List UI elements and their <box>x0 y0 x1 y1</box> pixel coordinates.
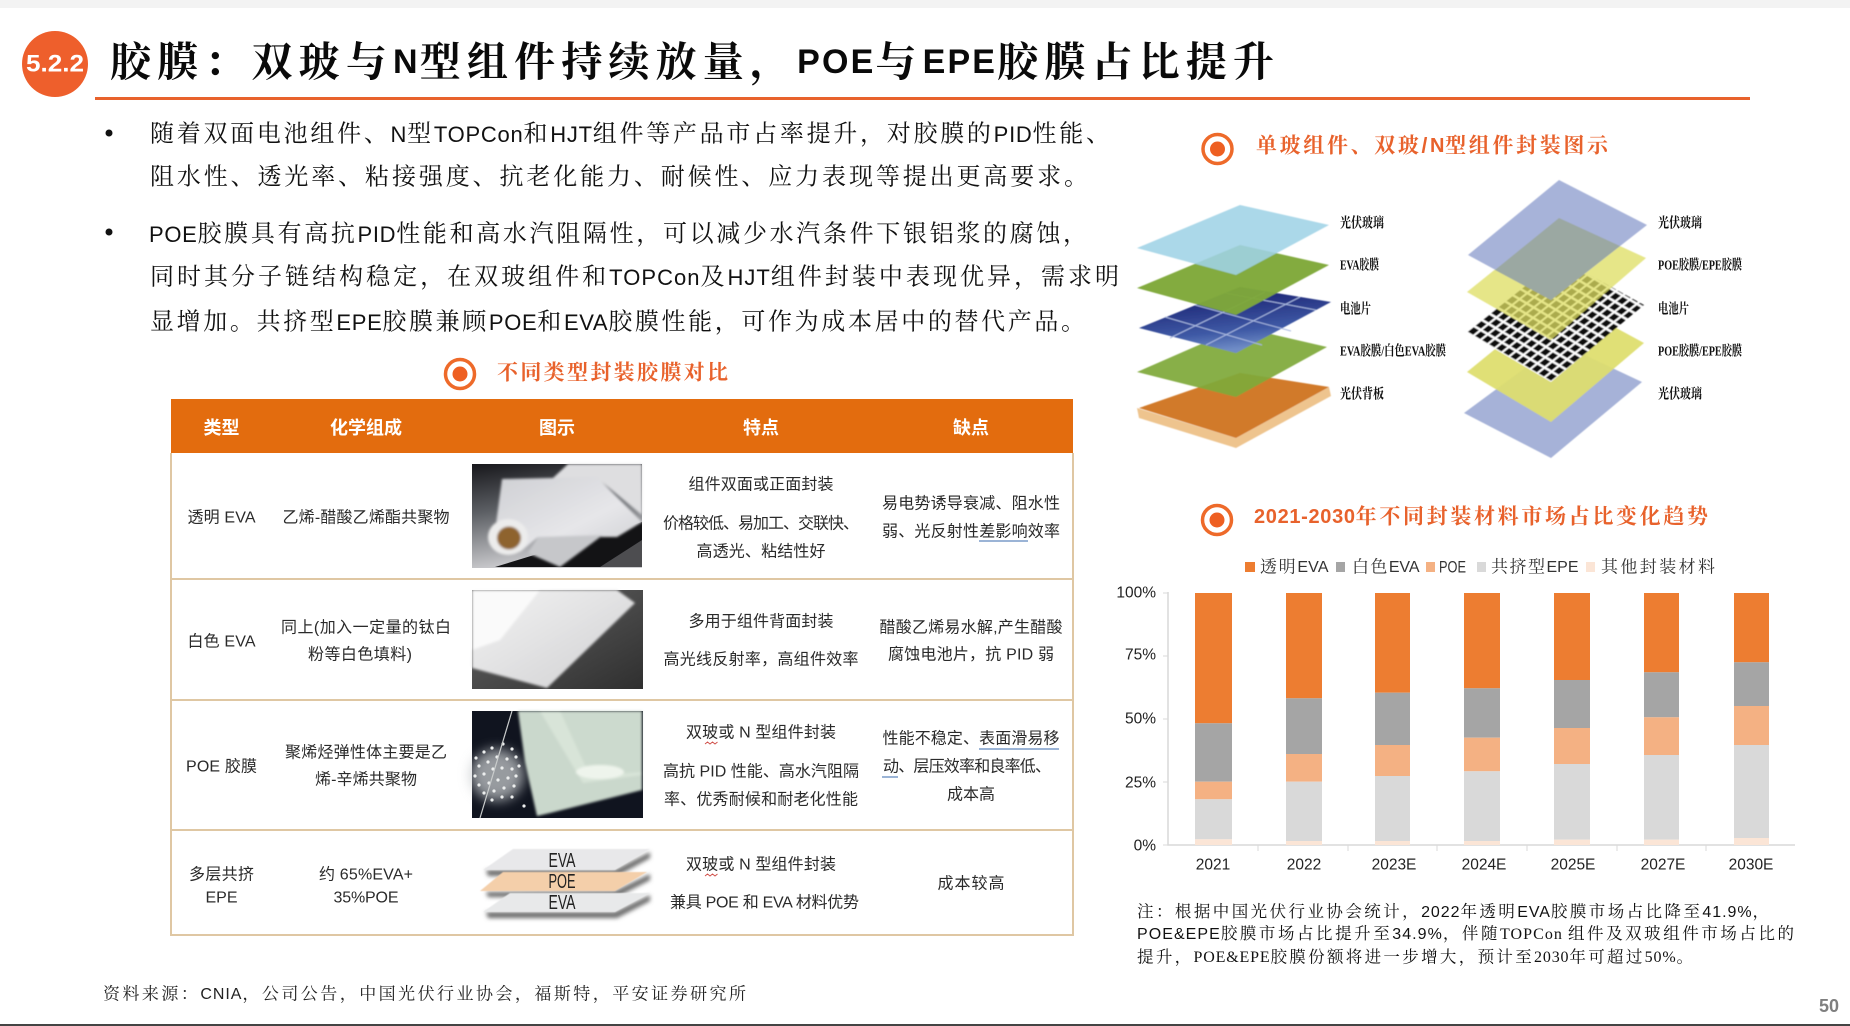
row: POE film <box>186 711 1060 818</box>
row: transparent EVA: 高透光、粘结性好 <box>696 542 826 560</box>
diagram labels: double glass: 光伏玻璃 <box>1658 386 1702 402</box>
row: white EVA: 多用于组件背面封装 <box>688 612 834 630</box>
bullet 2: POE胶膜具有高抗PID性能和高水汽阻隔性，可以减少水汽条件下银铝浆的腐蚀， <box>149 220 1087 248</box>
table header: 图示 <box>539 418 575 438</box>
row: transparent EVA: 透明 EVA <box>188 508 256 526</box>
y axis labels: 25% <box>1125 774 1156 792</box>
heading: market share trend: 2021-2030年不同封装材料市场占比变化趋势 <box>1254 504 1708 528</box>
bottom rule <box>0 1024 1850 1026</box>
chart legend: 其他封装材料 <box>1601 556 1715 576</box>
layer: glass over film overlap <box>1495 218 1620 300</box>
image: transparent EVA roll <box>472 464 642 568</box>
heading: encapsulation diagram <box>1203 134 1610 164</box>
bullet 2 <box>106 220 1119 336</box>
row: white EVA <box>188 590 1062 689</box>
row: POE film: 动、层压效率和良率低、 <box>883 758 1051 776</box>
row: transparent EVA: 组件双面或正面封装 <box>688 476 834 494</box>
y axis labels: 50% <box>1125 710 1156 728</box>
page number: 50 <box>1819 996 1839 1016</box>
bar 2023E <box>1375 593 1410 845</box>
diagram: single glass module <box>1137 205 1331 448</box>
row: multilayer EPE <box>189 849 1004 918</box>
row: multilayer EPE: 35%POE <box>334 890 398 906</box>
chart legend: 白色EVA <box>1352 558 1420 576</box>
row: multilayer EPE: 多层共挤 <box>189 866 254 884</box>
diagram labels: double glass <box>1658 214 1742 402</box>
diagram labels: double glass: POE胶膜/EPE胶膜 <box>1658 342 1742 360</box>
row: multilayer EPE: 兼具 POE 和 EVA 材料优势 <box>670 894 859 912</box>
table frame <box>171 453 1073 935</box>
row: transparent EVA: 价格较低、易加工、交联快、 <box>663 514 859 532</box>
row: POE film: 成本高 <box>947 786 995 804</box>
bullet 1: 随着双面电池组件、N型TOPCon和HJT组件等产品市占率提升，对胶膜的PID性能、 <box>150 120 1110 148</box>
intro text block <box>106 120 1119 336</box>
chart note: POE&EPE胶膜市场占比提升至34.9%，伴随TOPCon 组件及双玻组件市场占比的 <box>1137 924 1794 943</box>
row: white EVA: 高光线反射率，高组件效率 <box>664 650 858 668</box>
y axis labels: 75% <box>1125 646 1156 664</box>
layer: EVA film upper <box>1137 245 1329 315</box>
chart note: 注：根据中国光伏行业协会统计，2022年透明EVA胶膜市场占比降至41.9%， <box>1137 901 1769 921</box>
heading: market share trend <box>1202 504 1708 534</box>
x axis labels <box>1196 856 1773 874</box>
image: EVA POE EVA layers: POE <box>548 871 576 893</box>
diagram: double glass module <box>1464 180 1647 458</box>
heading: film comparison <box>446 360 728 388</box>
row: multilayer EPE: 成本较高 <box>938 874 1004 892</box>
title: 胶膜：双玻与N型组件持续放量，POE与EPE胶膜占比提升 <box>110 39 1274 86</box>
layer: upper POE film <box>1467 218 1646 340</box>
x axis labels: 2021 <box>1196 856 1230 874</box>
x axis labels: 2027E <box>1641 856 1685 874</box>
layer: lower POE film <box>1467 297 1644 422</box>
row: transparent EVA: 易电势诱导衰减、阻水性 <box>882 494 1060 512</box>
chart note <box>1137 901 1794 966</box>
x axis labels: 2030E <box>1729 856 1773 874</box>
table header <box>171 399 1073 453</box>
bar 2021 <box>1195 593 1232 845</box>
table header: 特点 <box>743 418 779 438</box>
row: transparent EVA: 弱、光反射性差影响效率 <box>882 522 1060 540</box>
row: POE film: 烯-辛烯共聚物 <box>315 770 417 788</box>
chart note: 提升，POE&EPE胶膜份额将进一步增大，预计至2030年可超过50%。 <box>1137 946 1693 966</box>
table header: 缺点 <box>953 418 989 438</box>
row: white EVA: 腐蚀电池片，抗 PID 弱 <box>888 646 1054 664</box>
row: POE film: POE 胶膜 <box>186 758 257 776</box>
heading: film comparison: 不同类型封装胶膜对比 <box>497 362 728 384</box>
row: white EVA: 白色 EVA <box>188 632 256 650</box>
layer: EVA film lower <box>1137 327 1327 397</box>
layer: upper glass <box>1468 180 1647 300</box>
row: multilayer EPE: 约 65%EVA+ <box>319 866 413 884</box>
diagram labels: single glass: EVA胶膜/白色EVA胶膜 <box>1340 342 1446 360</box>
image: EVA POE EVA layers <box>480 849 650 918</box>
bar 2025E <box>1554 593 1590 845</box>
comparison table <box>171 399 1073 935</box>
row: transparent EVA: 乙烯-醋酸乙烯酯共聚物 <box>282 508 450 526</box>
diagram labels: single glass: 光伏玻璃 <box>1340 214 1384 232</box>
diagram labels: double glass: 光伏玻璃 <box>1658 214 1702 232</box>
bar 2024E <box>1464 593 1500 845</box>
row: multilayer EPE: EPE <box>206 890 238 906</box>
source note: 资料来源：CNIA，公司公告，中国光伏行业协会，福斯特，平安证券研究所 <box>103 984 746 1004</box>
layer: solar cell <box>1139 287 1331 353</box>
chart legend: 共挤型EPE <box>1491 558 1578 576</box>
row: POE film: 聚烯烃弹性体主要是乙 <box>285 744 447 762</box>
layer: glass <box>1137 205 1329 275</box>
bullet 1: 阻水性、透光率、粘接强度、抗老化能力、耐候性、应力表现等提出更高要求。 <box>150 164 1088 190</box>
row: POE film: 率、优秀耐候和耐老化性能 <box>664 790 858 808</box>
chart legend <box>1245 556 1715 576</box>
layer: backsheet <box>1137 373 1331 448</box>
image: POE pellets and film <box>470 711 643 818</box>
bullet 1 <box>106 120 1110 190</box>
row: transparent EVA <box>188 464 1060 568</box>
x axis labels: 2024E <box>1462 856 1506 874</box>
table header: 化学组成 <box>330 417 402 438</box>
diagram labels: double glass: POE胶膜/EPE胶膜 <box>1658 256 1742 274</box>
image: white EVA sheet <box>472 590 643 689</box>
layer: cell grid <box>1466 258 1644 382</box>
row: POE film: 双玻或 N 型组件封装 <box>686 724 836 742</box>
bullet 2: 同时其分子链结构稳定，在双玻组件和TOPCon及HJT组件封装中表现优异，需求明 <box>150 264 1119 290</box>
bar 2030E <box>1734 593 1769 845</box>
diagram labels: single glass: 电池片 <box>1340 300 1371 318</box>
table header: 类型 <box>204 418 240 438</box>
y axis labels: 100% <box>1116 584 1156 602</box>
image: EVA POE EVA layers: EVA <box>548 850 576 872</box>
top band <box>0 0 1850 8</box>
y axis labels <box>1116 584 1156 854</box>
bullet 2: 显增加。共挤型EPE胶膜兼顾POE和EVA胶膜性能，可作为成本居中的替代产品。 <box>150 308 1085 336</box>
diagram labels: single glass: 光伏背板 <box>1340 386 1384 402</box>
row: white EVA: 同上(加入一定量的钛白 <box>281 618 451 636</box>
row: POE film: 高抗 PID 性能、高水汽阻隔 <box>663 762 859 780</box>
chart legend: 透明EVA <box>1260 558 1329 576</box>
chart legend: POE <box>1439 558 1466 576</box>
section number badge <box>22 31 88 97</box>
layer: lower glass <box>1464 343 1642 458</box>
title underline <box>95 97 1750 100</box>
x axis labels: 2025E <box>1551 856 1595 874</box>
diagram labels: single glass: EVA胶膜 <box>1340 256 1379 274</box>
diagram labels: double glass: 电池片 <box>1658 300 1689 318</box>
section number badge: 5.2.2 <box>26 50 84 78</box>
image: EVA POE EVA layers: EVA <box>548 892 576 914</box>
stacked bar chart <box>1116 584 1795 874</box>
row: POE film: 性能不稳定、表面滑易移 <box>882 730 1060 748</box>
bar 2022 <box>1286 593 1322 845</box>
x axis labels: 2023E <box>1372 856 1416 874</box>
bar 2027E <box>1644 593 1679 845</box>
row: multilayer EPE: 双玻或 N 型组件封装 <box>686 856 836 874</box>
diagram labels: single glass <box>1340 214 1446 402</box>
y axis labels: 0% <box>1134 838 1156 854</box>
x axis labels: 2022 <box>1287 856 1321 874</box>
heading: encapsulation diagram: 单玻组件、双玻/N型组件封装图示 <box>1256 134 1610 158</box>
row: white EVA: 粉等白色填料) <box>308 646 412 664</box>
row: white EVA: 醋酸乙烯易水解,产生醋酸 <box>880 618 1062 636</box>
